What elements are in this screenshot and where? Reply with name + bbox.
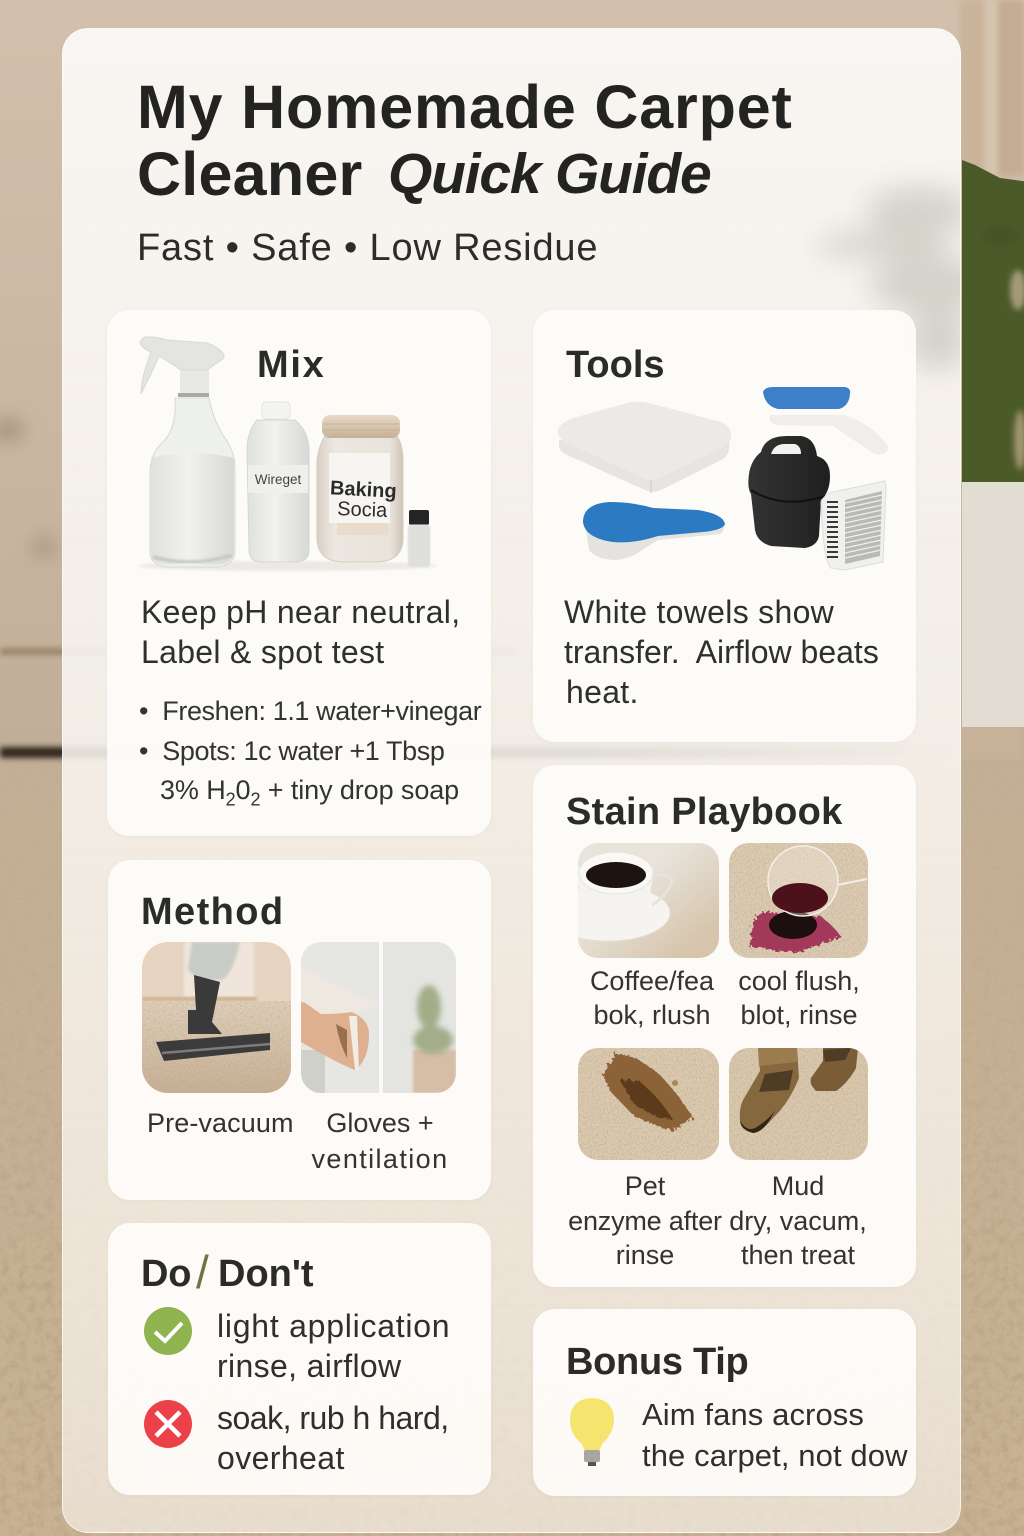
caption: coffee/tea: bok, rlush (593, 1000, 711, 1030)
baking soda jar (317, 436, 403, 562)
text: tools note: White towels show (564, 594, 834, 630)
heading: stain playbook: Stain Playbook (566, 791, 843, 833)
panel: tools (533, 310, 916, 742)
plant (962, 160, 1024, 482)
black extractor (748, 436, 830, 548)
heading: do / don't: Do (141, 1253, 191, 1295)
illustration: towels, brushes, extractor, fan (558, 387, 888, 570)
illustration: spray bottle, vinegar bottle, baking soda jar, small vial: Socia (337, 498, 388, 522)
caption: pet: Pet (625, 1171, 665, 1201)
bonus text: Aim fans across (642, 1397, 864, 1432)
caption: coffee/tea: Coffee/fea (590, 966, 714, 996)
photo: wine spill (729, 843, 868, 958)
caption: pet: rinse (616, 1240, 674, 1270)
caption: pet (568, 1171, 722, 1270)
photo: pet stain (578, 1048, 719, 1160)
icon: green check (144, 1307, 192, 1355)
panel: bonus tip (533, 1309, 916, 1496)
text: keep pH near neutral: Keep pH near neutral, (141, 594, 460, 630)
illustration: spray bottle, vinegar bottle, baking soda jar, small vial: Wireget (255, 472, 302, 487)
recipe list: • Spots: 1c water +1 Tbsp (139, 736, 444, 766)
heading: do / don't (141, 1246, 314, 1298)
caption: mud: then treat (741, 1240, 855, 1270)
title (137, 73, 793, 208)
caption: pet: enzyme after (568, 1206, 722, 1236)
curtain stripes at right (955, 0, 1024, 760)
title: My Homemade Carpet (137, 73, 793, 141)
caption: wine (738, 966, 860, 1030)
heading: do / don't: / (196, 1246, 209, 1298)
panel: stain playbook (533, 765, 916, 1287)
heading: bonus tip: Bonus Tip (566, 1341, 748, 1383)
caption: gloves and ventilation: Gloves + (326, 1108, 434, 1138)
caption: gloves and ventilation (312, 1108, 448, 1174)
caption: wine: cool flush, (738, 966, 860, 996)
towels (559, 438, 730, 492)
panel: mix: Label & spot test (141, 634, 384, 670)
heading: tools: Tools (566, 344, 665, 386)
caption: mud (729, 1171, 867, 1270)
spray bottle (150, 398, 235, 567)
plant shadow seen through panel (818, 176, 960, 377)
caption: coffee/tea (590, 966, 714, 1030)
panel: tools: heat. (566, 674, 639, 710)
panel: mix (107, 310, 491, 836)
caption: wine: blot, rinse (740, 1000, 858, 1030)
subtitle: Fast • Safe • Low Residue (137, 227, 598, 269)
don't text (217, 1400, 449, 1476)
do text (217, 1308, 450, 1384)
caption: mud: Mud (772, 1171, 824, 1201)
do text: rinse, airflow (217, 1348, 402, 1384)
photo: coffee cup (578, 843, 719, 958)
caption: mud: dry, vacum, (729, 1206, 867, 1236)
air purifier fan (821, 481, 886, 570)
heading: do / don't: Don't (218, 1253, 314, 1295)
icon: red cross (144, 1400, 192, 1448)
recipe list: 3% H202 + tiny drop soap (160, 775, 459, 809)
photo: muddy boots (729, 1048, 868, 1160)
caption: gloves and ventilation: ventilation (312, 1144, 448, 1174)
blue scrub brush (585, 522, 725, 560)
white pot (962, 482, 1024, 727)
recipe list: • Freshen: 1.1 water+vinegar (139, 696, 481, 726)
caption: pre-vacuum: Pre-vacuum (147, 1108, 294, 1138)
heading: mix: Mix (257, 344, 325, 386)
panel: method (108, 860, 491, 1200)
illustration: spray bottle, vinegar bottle, baking soda jar, small vial: Baking (329, 477, 397, 503)
vial (409, 510, 429, 525)
title: Cleaner (137, 140, 363, 208)
recipe list (139, 696, 482, 809)
icon: light bulb (570, 1398, 614, 1466)
do text: light application (217, 1308, 450, 1344)
heading: method: Method (141, 891, 284, 933)
don't text: soak, rub h hard, (217, 1400, 449, 1436)
blue pad and handle brush (769, 415, 888, 454)
photo: gloved hand and window (301, 942, 456, 1093)
title: Quick Guide (388, 142, 711, 206)
don't text: overheat (217, 1440, 345, 1476)
panel: do and don't (108, 1223, 491, 1495)
panel: tools: transfer. Airflow beats (564, 634, 879, 670)
photo: vacuum on carpet (142, 942, 291, 1093)
wireget bottle (247, 420, 309, 562)
bonus text: the carpet, not dow (642, 1438, 908, 1473)
bonus text (642, 1397, 908, 1473)
blurred sofa details at left (0, 418, 56, 557)
illustration: spray bottle, vinegar bottle, baking soda jar, small vial (139, 336, 435, 572)
